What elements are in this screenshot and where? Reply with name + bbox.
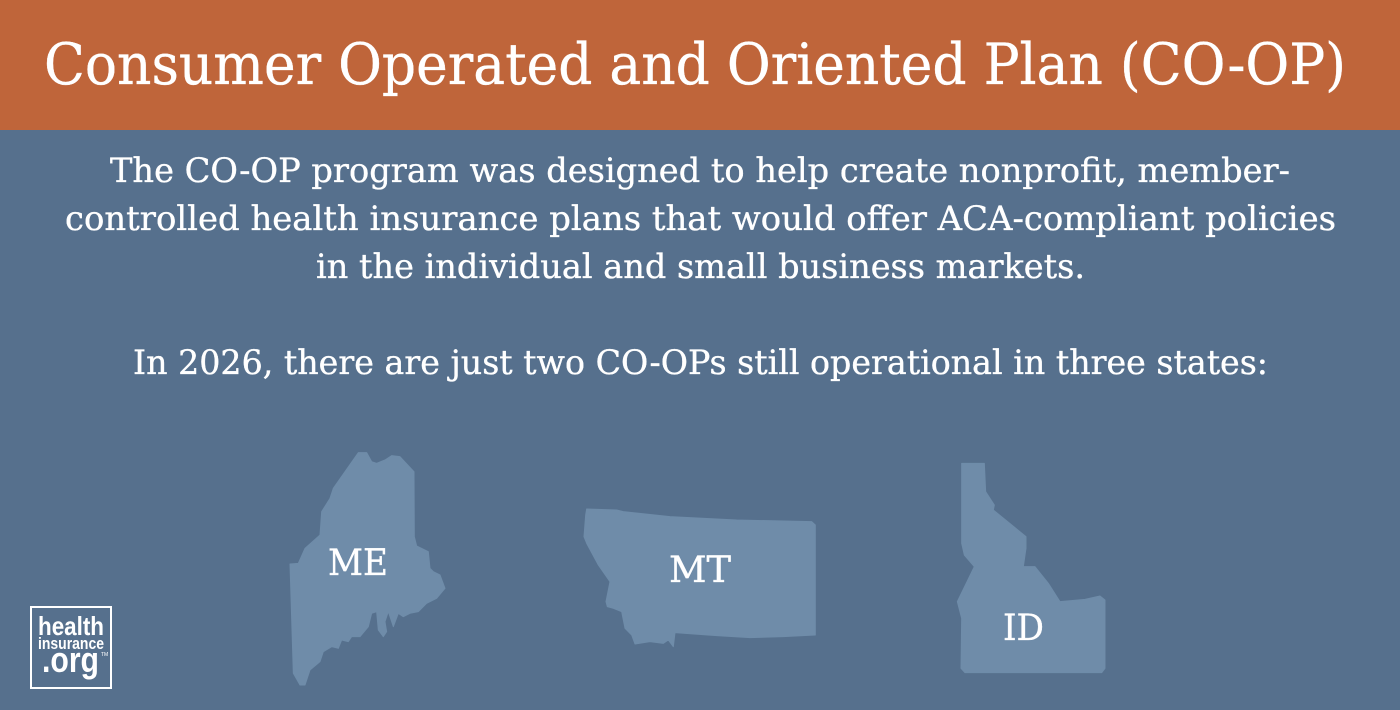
intro text block: in the individual and small business markets. — [316, 247, 1085, 287]
logo: healthinsurance.org — [31, 607, 111, 688]
title banner — [0, 0, 1400, 130]
state: Montana — [584, 509, 815, 647]
intro text block: controlled health insurance plans that would offer ACA-compliant policies — [65, 199, 1336, 239]
title: Consumer Operated and Oriented Plan (CO-OP) — [44, 32, 1346, 98]
logo: healthinsurance.org: .org — [42, 639, 99, 680]
logo: healthinsurance.org: health — [38, 611, 104, 641]
status statement: In 2026, there are just two CO-OPs still operational in three states: — [133, 343, 1268, 383]
intro text block — [65, 151, 1336, 287]
state: Idaho — [957, 463, 1105, 673]
intro text block: The CO-OP program was designed to help create nonprofit, member- — [110, 151, 1290, 191]
state: Maine — [290, 453, 445, 685]
logo: healthinsurance.org: TM — [101, 652, 108, 658]
logo: healthinsurance.org: insurance — [38, 634, 104, 653]
label: ID: ID — [1003, 608, 1044, 649]
label: MT: MT — [669, 550, 731, 591]
label: ME: ME — [328, 543, 388, 584]
